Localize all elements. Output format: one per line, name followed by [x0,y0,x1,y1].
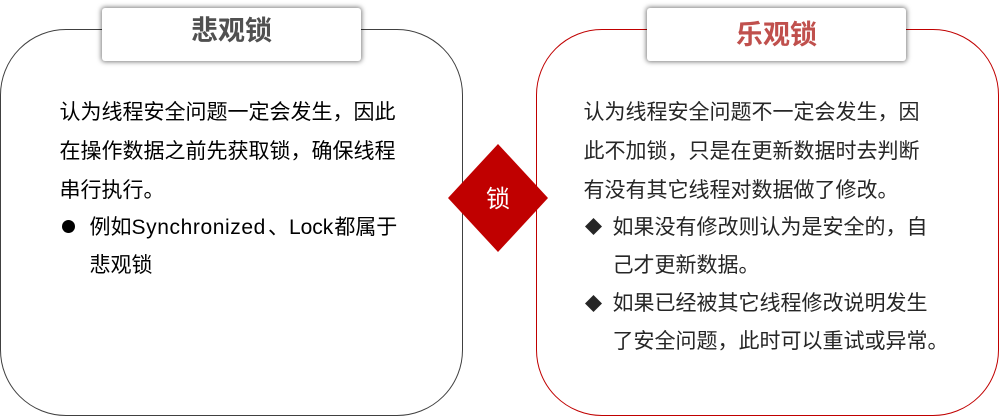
text block: optimistic description: 此不加锁，只是在更新数据时去判断 [584,140,920,163]
panel: pessimistic lock [0,29,463,416]
text block: pessimistic description: 在操作数据之前先获取锁，确保线程 [60,140,396,163]
text block: optimistic description [584,100,948,353]
text block: pessimistic description: 认为线程安全问题一定会发生，因此 [60,101,396,124]
text block: pessimistic description: 串行执行。 [60,179,164,202]
text block: optimistic description: 如果已经被其它线程修改说明发生 [612,292,928,315]
text block: pessimistic description [60,100,397,277]
heading: pessimistic lock: 悲观锁 [191,16,272,46]
heading: pessimistic lock [102,8,361,61]
panel: optimistic lock [536,29,999,416]
text block: optimistic description: 己才更新数据。 [612,254,760,277]
icon: diamond bullet two [585,295,602,312]
text block: optimistic description: 了安全问题，此时可以重试或异常。 [612,330,948,353]
text block: pessimistic description: 悲观锁 [90,254,152,277]
text block: optimistic description: 有没有其它线程对数据做了修改。 [584,179,898,202]
text block: optimistic description: 如果没有修改则认为是安全的，自 [612,216,928,239]
icon: diamond bullet one [585,218,602,235]
heading: optimistic lock [647,8,906,61]
heading: optimistic lock: 乐观锁 [736,20,817,50]
center diamond badge [448,144,548,252]
text block: optimistic description: 认为线程安全问题不一定会发生，因 [584,101,920,124]
text block: pessimistic description: 例如Synchronized、Lock都属于 [90,216,397,239]
center diamond badge: 锁 [486,186,510,213]
icon: round bullet [62,220,75,233]
